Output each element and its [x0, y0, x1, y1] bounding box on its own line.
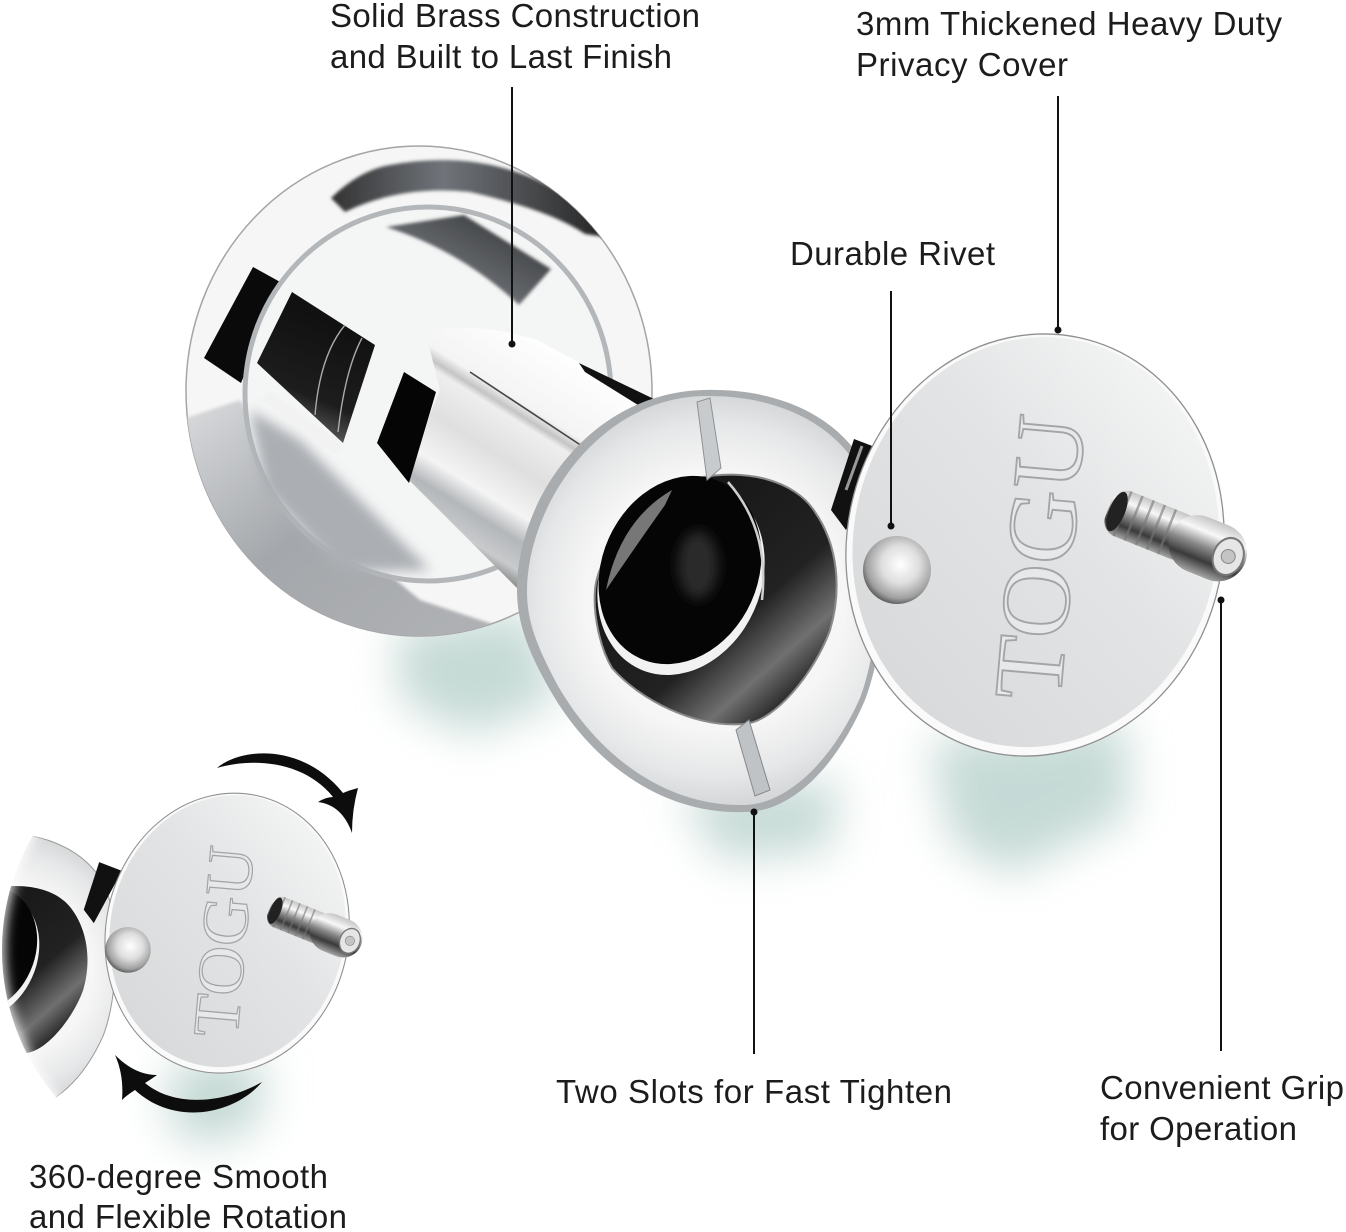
- callout: privacy cover: [856, 5, 1282, 334]
- recess grey top: [386, 215, 551, 305]
- product: door viewer: [180, 146, 1263, 875]
- callout: privacy cover: Privacy Cover: [856, 46, 1068, 83]
- callout: convenient grip: for Operation: [1100, 1110, 1297, 1147]
- inset disc: [79, 770, 375, 1096]
- flange left black stripe: [204, 267, 282, 383]
- cover disc: [807, 299, 1263, 791]
- ring slots: [697, 398, 721, 480]
- callout: privacy cover: 3mm Thickened Heavy Duty: [856, 5, 1282, 42]
- arrow: top rotation: [217, 753, 358, 833]
- callout: convenient grip: [1100, 596, 1344, 1147]
- callout: solid brass: and Built to Last Finish: [330, 38, 672, 75]
- ground shadows: [395, 610, 1130, 875]
- callout: rotation: [29, 1158, 347, 1232]
- callout: convenient grip: Convenient Grip: [1100, 1069, 1344, 1106]
- callout: durable rivet: Durable Rivet: [790, 235, 995, 272]
- callout: solid brass: [330, 0, 700, 348]
- threaded dark band: [257, 292, 375, 443]
- flange lower shading: [188, 400, 493, 636]
- inset grip: [262, 890, 368, 963]
- inner tube rim: [567, 454, 795, 702]
- engraved logo: TOGU: [974, 411, 1107, 704]
- inset logo: TOGU: [179, 843, 269, 1040]
- front ring: [517, 390, 884, 812]
- hinge arm: [831, 439, 888, 530]
- callout: durable rivet: [790, 235, 995, 530]
- tube: [405, 328, 656, 596]
- rivet: [863, 536, 931, 604]
- callout: rotation: 360-degree Smooth: [29, 1158, 328, 1195]
- back flange: [180, 146, 652, 660]
- grip knob: [1098, 481, 1256, 590]
- inset: rotating cover: [0, 718, 462, 1182]
- inset rivet: [105, 927, 151, 973]
- inset shadow: [170, 1055, 262, 1145]
- flange top dark crescent: [331, 160, 612, 238]
- tube top dark edge: [579, 363, 656, 410]
- arrow: bottom rotation: [115, 1055, 262, 1112]
- ring bore: [595, 475, 837, 724]
- callout: two slots: Two Slots for Fast Tighten: [556, 1073, 952, 1110]
- callout: two slots: [556, 808, 952, 1110]
- flange recess: [245, 207, 611, 581]
- inset ring: [0, 833, 122, 1107]
- flange black band: [377, 372, 436, 483]
